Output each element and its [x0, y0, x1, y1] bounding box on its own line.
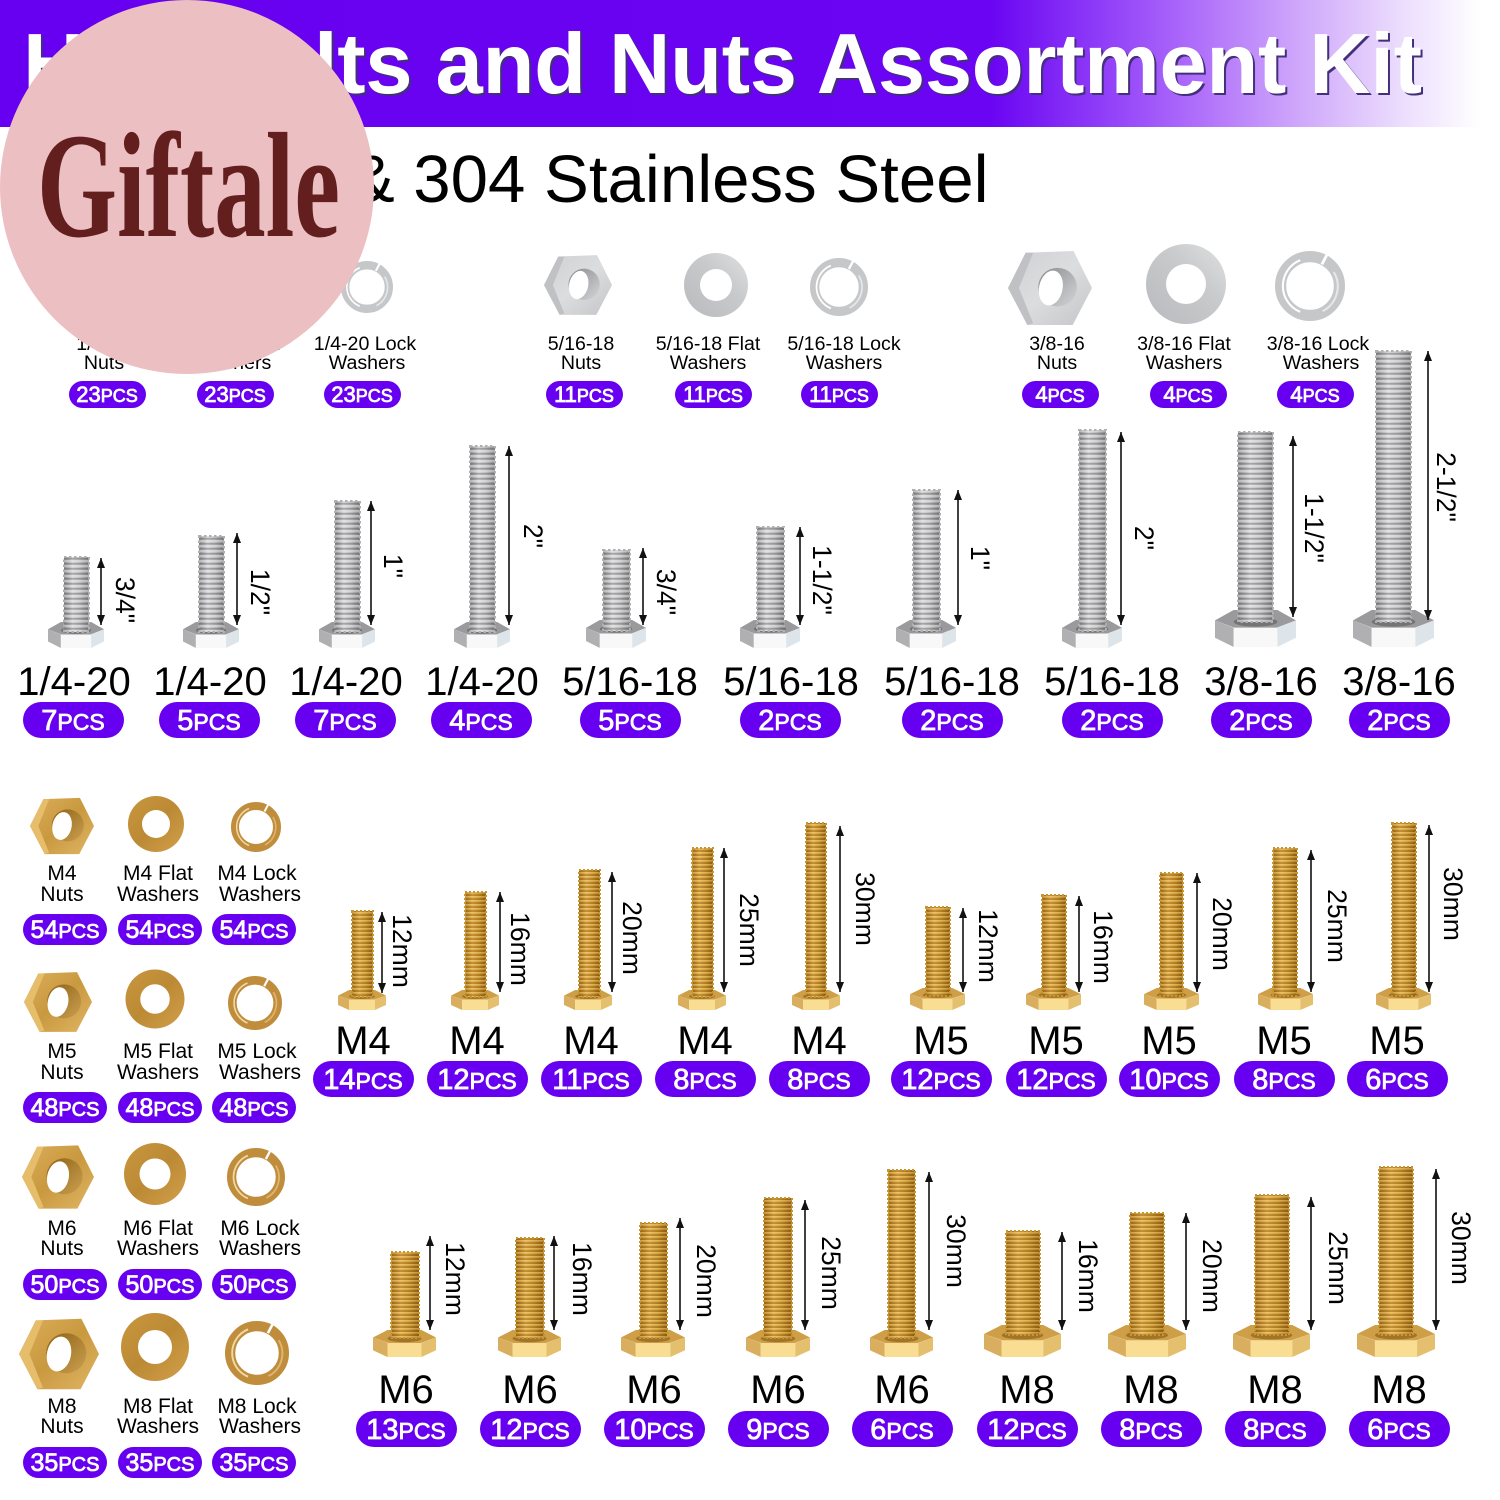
pill: 4pcs: 4PCS [1290, 382, 1340, 407]
bolt: M5 20mm [1119, 873, 1237, 1097]
bolt: 1/4-20 2in [425, 446, 548, 738]
bolt: M5 20mm: 10PCS [1129, 1064, 1209, 1096]
bolt: M8 25mm: 25mm [1323, 1231, 1353, 1305]
bolt: 5/16-18 1-1/2in [723, 527, 859, 738]
bolt: 1/4-20 2in: 2" [518, 524, 548, 548]
icon: 5/16-18 nut [544, 255, 612, 315]
bolt: M4 12mm: M4 [335, 1019, 391, 1063]
label: M8 flat washers: M8 Flat [123, 1395, 193, 1418]
bolt: 5/16-18 2in: 5/16-18 [1044, 660, 1180, 704]
bolt: M4 16mm [427, 892, 535, 1097]
label: 3/8-16 flat washers: 3/8-16 Flat [1137, 333, 1231, 355]
bolt: M6 20mm: 10PCS [614, 1414, 694, 1446]
bolt: M4 20mm [541, 870, 647, 1097]
bolt: 5/16-18 1in [884, 490, 1020, 738]
bolt: 5/16-18 2in: 2PCS [1080, 705, 1144, 737]
icon: M6 flat washer [124, 1143, 186, 1205]
bolt: M5 12mm [891, 907, 1003, 1097]
title: Hex Bolts and Nuts Assortment Kit [23, 17, 1422, 112]
label: 3/8-16 lock washers: Washers [1283, 352, 1359, 374]
icon: 3/8-16 flat washer [1146, 244, 1226, 324]
label: 3/8-16 flat washers: Washers [1146, 352, 1222, 374]
bolt: M4 30mm: M4 [791, 1019, 847, 1063]
bolt: 1/4-20 1/2in [153, 533, 275, 738]
bolt: M5 25mm: 25mm [1322, 889, 1352, 963]
bolt: 5/16-18 3/4in [562, 548, 698, 738]
bolt: 5/16-18 1in: 1" [965, 546, 995, 570]
bolt: 5/16-18 3/4in: 5/16-18 [562, 660, 698, 704]
pill: 4pcs: 4PCS [1163, 382, 1213, 407]
pill: 4pcs [1277, 381, 1354, 408]
title banner [0, 0, 1500, 127]
bolt: M4 25mm: 8PCS [673, 1064, 737, 1096]
bolt: M4 25mm: M4 [677, 1019, 733, 1063]
bolt: 1/4-20 1in [289, 501, 408, 738]
label: M4 flat washers: Washers [117, 883, 199, 906]
bolt: 1/4-20 3/4in: 3/4" [110, 577, 140, 623]
bolt: M4 25mm [655, 848, 764, 1097]
bolt: M8 16mm: 16mm [1073, 1239, 1103, 1313]
bolt: 1/4-20 1in: 1" [378, 554, 408, 578]
bolt: M4 20mm: 20mm [617, 901, 647, 975]
bolt: M8 25mm [1225, 1195, 1353, 1447]
bolt: M5 25mm: 8PCS [1252, 1064, 1316, 1096]
bolt: M8 16mm: 12PCS [987, 1414, 1067, 1446]
label: M5 lock washers: M5 Lock [217, 1040, 297, 1063]
bolt: 3/8-16 1-1/2in [1204, 432, 1329, 738]
bolt: M5 30mm: M5 [1369, 1019, 1425, 1063]
bolt: M6 12mm: M6 [378, 1368, 434, 1412]
bolt: 1/4-20 3/4in: 7PCS [41, 705, 105, 737]
bolt: 3/8-16 2-1/2in: 2PCS [1367, 705, 1431, 737]
label: 5/16-18 flat washers: 5/16-18 Flat [656, 333, 761, 355]
bolt: M6 16mm [480, 1236, 597, 1447]
icon: M4 flat washer [128, 796, 184, 852]
bolt: M5 12mm: M5 [913, 1019, 969, 1063]
bolt: 5/16-18 1in: 2PCS [920, 705, 984, 737]
label: M6 nuts: M6 [47, 1217, 77, 1240]
label: M5 flat washers: M5 Flat [123, 1040, 193, 1063]
label: M6 lock washers: Washers [219, 1237, 301, 1260]
label: M4 nuts: M4 [47, 862, 77, 885]
bolt: M5 16mm: 12PCS [1016, 1064, 1096, 1096]
bolt: 3/8-16 2-1/2in: 2-1/2" [1431, 452, 1461, 522]
pill: 54pcs: 54PCS [220, 916, 288, 944]
bolt: M8 25mm: 8PCS [1243, 1414, 1307, 1446]
icon: M4 lock washer [235, 803, 277, 848]
label: M6 lock washers: M6 Lock [220, 1217, 300, 1240]
bolt: M4 25mm: 25mm [734, 893, 764, 967]
bolt: M4 16mm: M4 [449, 1019, 505, 1063]
icon: M6 nut [22, 1145, 94, 1209]
icon: 1/4-20 nut [74, 259, 134, 311]
bolt: 1/4-20 2in: 4PCS [449, 705, 513, 737]
pill: 35pcs: 35PCS [31, 1449, 99, 1477]
icon: M5 flat washer [126, 970, 184, 1028]
bolt: M8 16mm: M8 [999, 1368, 1055, 1412]
bolt: M5 16mm: M5 [1028, 1019, 1084, 1063]
label: M4 flat washers: M4 Flat [123, 862, 193, 885]
pill: 35pcs: 35PCS [220, 1449, 288, 1477]
bolt: 1/4-20 3/4in: 1/4-20 [17, 660, 131, 704]
label: 1/4-20 flat washers: 1/4-20 Flat [186, 333, 280, 355]
bolt: M4 20mm: 11PCS [552, 1064, 630, 1096]
bolt: M5 16mm [1006, 895, 1118, 1097]
label: 5/16-18 lock washers: 5/16-18 Lock [787, 333, 901, 355]
bolt: 1/4-20 1in: 1/4-20 [289, 660, 403, 704]
bolt: M8 25mm: M8 [1247, 1368, 1303, 1412]
bolt: M8 20mm: M8 [1123, 1368, 1179, 1412]
icon: 1/4-20 flat washer [207, 257, 263, 313]
bolt: M8 16mm [977, 1231, 1103, 1447]
bolt: M6 30mm: 30mm [941, 1214, 971, 1288]
icon: 5/16-18 flat washer [684, 253, 748, 317]
label: 5/16-18 flat washers: Washers [670, 352, 746, 374]
label: M8 nuts: M8 [47, 1395, 77, 1418]
label: 1/4-20 flat washers: Washers [195, 352, 271, 374]
pill: 23pcs: 23PCS [76, 382, 138, 407]
label: 3/8-16 nuts: 3/8-16 [1029, 333, 1085, 355]
bolt: M8 20mm [1101, 1213, 1227, 1447]
pill: 50pcs: 50PCS [31, 1271, 99, 1299]
label: M8 nuts: Nuts [40, 1415, 84, 1438]
bolt: M8 20mm: 20mm [1197, 1239, 1227, 1313]
bolt: 3/8-16 1-1/2in: 1-1/2" [1299, 493, 1329, 563]
label: M8 flat washers: Washers [117, 1415, 199, 1438]
bolt: M4 12mm: 12mm [387, 914, 417, 988]
bolt: M6 25mm [728, 1198, 846, 1447]
logo wordmark: Giftale [37, 103, 340, 269]
icon: 3/8-16 nut [1008, 251, 1092, 325]
bolt: 3/8-16 1-1/2in: 2PCS [1229, 705, 1293, 737]
bolt: 1/4-20 1/2in: 5PCS [177, 705, 241, 737]
pill: 54pcs: 54PCS [31, 916, 99, 944]
bolt: M4 30mm [769, 823, 880, 1097]
label: 3/8-16 lock washers: 3/8-16 Lock [1267, 333, 1369, 355]
bolt: M8 30mm [1349, 1167, 1476, 1447]
label: M4 nuts: Nuts [40, 883, 84, 906]
bolt: M4 16mm: 16mm [505, 912, 535, 986]
bolt: M6 12mm: 13PCS [366, 1414, 446, 1446]
bolt: M5 25mm [1234, 848, 1352, 1097]
bolt: M5 30mm [1347, 823, 1468, 1097]
bolt: M5 20mm: M5 [1141, 1019, 1197, 1063]
bolt: 5/16-18 2in [1044, 430, 1180, 738]
label: M8 lock washers: Washers [219, 1415, 301, 1438]
pill: 4pcs [1022, 381, 1099, 408]
label: 5/16-18 nuts: Nuts [561, 352, 601, 374]
pill: 50pcs: 50PCS [220, 1271, 288, 1299]
bolt: M6 30mm [852, 1170, 971, 1447]
icon: 5/16-18 lock washer [815, 259, 863, 311]
bolt: M4 20mm: M4 [563, 1019, 619, 1063]
label: 5/16-18 nuts: 5/16-18 [548, 333, 614, 355]
bolt: M6 16mm: 16mm [567, 1242, 597, 1316]
bolt: 3/8-16 2-1/2in [1342, 351, 1461, 738]
label: M6 flat washers: Washers [117, 1237, 199, 1260]
subtitle: Brass & 304 Stainless Steel [159, 142, 988, 217]
panel: steel nuts and washers [69, 244, 1369, 408]
bolt: M6 12mm: 12mm [440, 1242, 470, 1316]
bolt: M8 30mm: 30mm [1446, 1211, 1476, 1285]
icon: M8 lock washer [230, 1322, 284, 1380]
panel: brass nuts and washers [19, 796, 301, 1478]
bolt: 5/16-18 1-1/2in: 1-1/2" [807, 545, 837, 615]
bolt: M6 16mm: M6 [502, 1368, 558, 1412]
pill: 4pcs [1150, 381, 1227, 408]
bolt: 3/8-16 1-1/2in: 3/8-16 [1204, 660, 1318, 704]
label: 1/4-20 lock washers: Washers [329, 352, 405, 374]
label: 1/4-20 nuts: Nuts [84, 352, 124, 374]
bolt: 5/16-18 1-1/2in: 5/16-18 [723, 660, 859, 704]
pill: 48pcs: 48PCS [220, 1094, 288, 1122]
label: 1/4-20 lock washers: 1/4-20 Lock [314, 333, 416, 355]
pill: 50pcs: 50PCS [126, 1271, 194, 1299]
bolt: M6 16mm: 12PCS [490, 1414, 570, 1446]
label: 3/8-16 nuts: Nuts [1037, 352, 1077, 374]
panel: brass bolts M4 and M5 [313, 823, 1468, 1097]
bolt: M4 30mm: 30mm [850, 872, 880, 946]
icon: M8 flat washer [121, 1313, 189, 1381]
bolt: M6 12mm [356, 1236, 470, 1447]
bolt: 5/16-18 3/4in: 5PCS [598, 705, 662, 737]
label: M8 lock washers: M8 Lock [217, 1395, 297, 1418]
bolt: 1/4-20 3/4in [17, 557, 140, 738]
bolt: 1/4-20 2in: 1/4-20 [425, 660, 539, 704]
panel: brass bolts M6 and M8 [356, 1167, 1476, 1447]
bolt: M8 30mm: 6PCS [1367, 1414, 1431, 1446]
bolt: 5/16-18 1in: 5/16-18 [884, 660, 1020, 704]
pill: 11pcs: 11PCS [554, 382, 614, 407]
label: M5 nuts: M5 [47, 1040, 77, 1063]
label: M4 lock washers: Washers [219, 883, 301, 906]
bolt: M5 12mm: 12PCS [901, 1064, 981, 1096]
bolt: 3/8-16 2-1/2in: 3/8-16 [1342, 660, 1456, 704]
bolt: M5 16mm: 16mm [1088, 910, 1118, 984]
logo circle [0, 0, 374, 374]
bolt: M6 20mm: M6 [626, 1368, 682, 1412]
bolt: M4 12mm: 14PCS [323, 1064, 403, 1096]
bolt: M5 20mm: 20mm [1207, 897, 1237, 971]
bolt: M8 20mm: 8PCS [1119, 1414, 1183, 1446]
pill: 54pcs: 54PCS [126, 916, 194, 944]
bolt: M6 30mm: 6PCS [870, 1414, 934, 1446]
icon: 1/4-20 lock washer [345, 262, 389, 309]
bolt: M5 12mm: 12mm [973, 909, 1003, 983]
bolt: 1/4-20 1/2in: 1/2" [245, 569, 275, 615]
label: M5 nuts: Nuts [40, 1061, 84, 1084]
bolt: M8 30mm: M8 [1371, 1368, 1427, 1412]
bolt: M6 25mm: 9PCS [746, 1414, 810, 1446]
label: M6 flat washers: M6 Flat [123, 1217, 193, 1240]
bolt: M6 25mm: 25mm [816, 1236, 846, 1310]
icon: M8 nut [19, 1319, 99, 1389]
label: M5 lock washers: Washers [219, 1061, 301, 1084]
label: 5/16-18 lock washers: Washers [806, 352, 882, 374]
pill: 23pcs: 23PCS [331, 382, 393, 407]
pill: 11pcs: 11PCS [809, 382, 869, 407]
panel: steel bolts [17, 351, 1461, 738]
bolt: M5 30mm: 30mm [1438, 867, 1468, 941]
label: M4 lock washers: M4 Lock [217, 862, 297, 885]
bolt: M4 16mm: 12PCS [437, 1064, 517, 1096]
label: 1/4-20 nuts: 1/4-20 [76, 333, 132, 355]
icon: M5 nut [24, 972, 92, 1032]
bolt: 5/16-18 2in: 2" [1129, 526, 1159, 550]
pill: 35pcs: 35PCS [126, 1449, 194, 1477]
pill: 48pcs: 48PCS [31, 1094, 99, 1122]
pill: 4pcs: 4PCS [1035, 382, 1085, 407]
bolt: M6 20mm: 20mm [691, 1244, 721, 1318]
bolt: M4 30mm: 8PCS [787, 1064, 851, 1096]
label: M6 nuts: Nuts [40, 1237, 84, 1260]
bolt: M6 25mm: M6 [750, 1368, 806, 1412]
pill: 48pcs: 48PCS [126, 1094, 194, 1122]
bolt: 5/16-18 1-1/2in: 2PCS [758, 705, 822, 737]
bolt: M6 20mm [604, 1218, 721, 1447]
bolt: M5 25mm: M5 [1256, 1019, 1312, 1063]
pill: 11pcs: 11PCS [683, 382, 743, 407]
bolt: 5/16-18 3/4in: 3/4" [651, 569, 681, 615]
bolt: M5 30mm: 6PCS [1365, 1064, 1429, 1096]
pill: 23pcs: 23PCS [204, 382, 266, 407]
label: M5 flat washers: Washers [117, 1061, 199, 1084]
icon: 3/8-16 lock washer [1281, 252, 1339, 315]
icon: M5 lock washer [232, 977, 278, 1026]
bolt: M6 30mm: M6 [874, 1368, 930, 1412]
logo badge [0, 0, 374, 374]
bolt: 1/4-20 1in: 7PCS [313, 705, 377, 737]
icon: M6 lock washer [232, 1149, 280, 1201]
bolt: M4 12mm [313, 911, 417, 1097]
icon: M4 nut [30, 798, 94, 854]
bolt: 1/4-20 1/2in: 1/4-20 [153, 660, 267, 704]
